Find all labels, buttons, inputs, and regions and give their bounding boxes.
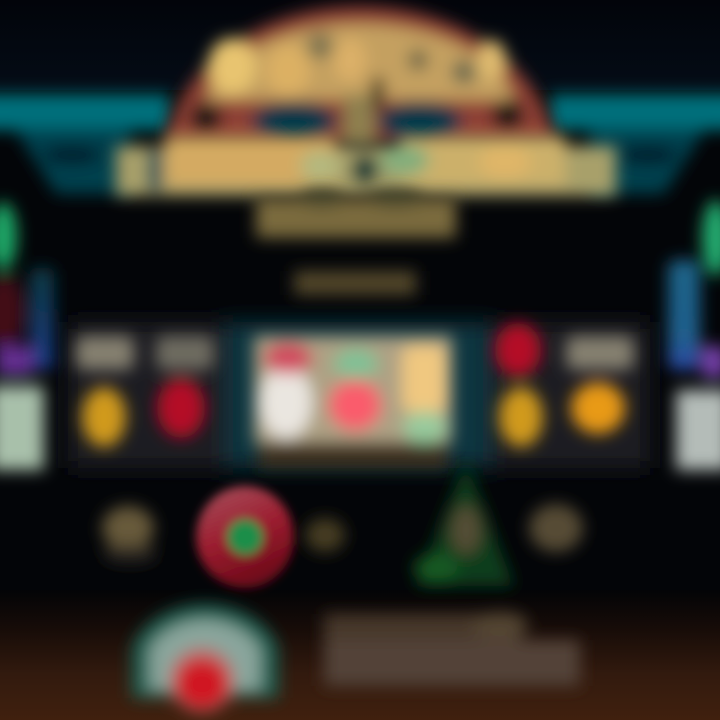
reel middle (334, 348, 378, 380)
gold subtitle (256, 189, 456, 238)
arch dark windows (190, 102, 222, 134)
panel: center reels (254, 336, 452, 468)
right side machine (668, 200, 720, 470)
reel left (260, 366, 312, 438)
dim caption (294, 271, 416, 295)
right symbols (495, 323, 634, 447)
green tree (414, 462, 514, 586)
machine cabinet (68, 322, 650, 468)
bottom left gauge (132, 604, 278, 712)
red roulette chip (196, 486, 294, 588)
bottom right text block (324, 612, 580, 686)
marquee gold banner (116, 136, 616, 196)
arch letter blobs (208, 38, 256, 94)
token left (102, 506, 158, 563)
bottom row symbols (102, 462, 583, 588)
reel right (402, 345, 446, 413)
teal side bands (0, 94, 720, 194)
left symbols (76, 336, 214, 447)
arch red rim (166, 6, 554, 142)
token right (529, 504, 583, 552)
token center (305, 518, 345, 552)
arch gold body (205, 24, 515, 100)
marquee arch (166, 6, 554, 145)
left side machine (0, 202, 54, 470)
